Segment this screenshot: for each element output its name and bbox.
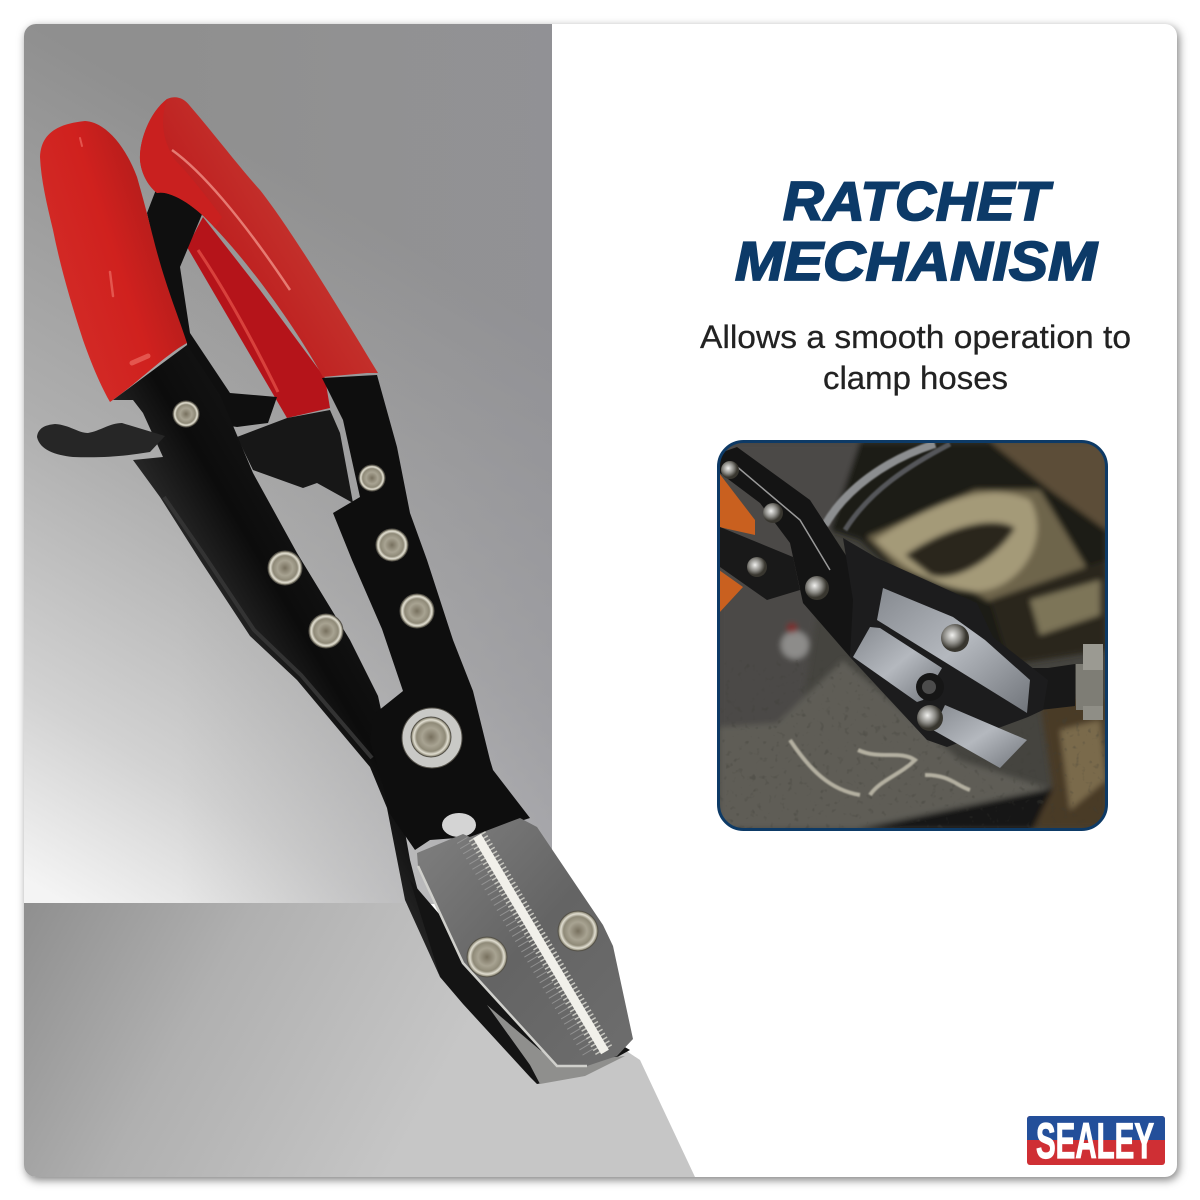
left handle rivets [268, 551, 343, 648]
lower silver plate: rear piece [853, 627, 942, 702]
ratchet plate [237, 410, 353, 503]
right handle black arm [322, 375, 530, 850]
left arm edge strip [164, 497, 372, 758]
grip: right handle inner sleeve [187, 217, 330, 418]
jaw back [843, 538, 1048, 747]
pivot washer [402, 708, 462, 768]
hose end [916, 673, 938, 700]
hose clamp [1076, 644, 1103, 720]
description text: clamp hoses [823, 360, 1008, 396]
heading [735, 170, 1098, 292]
rivets [173, 401, 598, 977]
jaw plate [417, 818, 633, 1066]
description text [700, 319, 1131, 396]
product: hose clamp pliers [37, 97, 633, 1084]
grip highlight [172, 150, 290, 290]
grit texture [719, 660, 1106, 829]
jaw rivets [467, 911, 598, 977]
jaw serrated teeth [462, 836, 605, 1056]
grip: right handle outer sleeve [140, 97, 378, 377]
jaw silver edge [487, 1005, 625, 1084]
ratchet release lever [37, 423, 165, 457]
jaw silver rim [418, 866, 587, 1066]
panel: studio backdrop [24, 24, 695, 1177]
description text: Allows a smooth operation to [700, 319, 1131, 355]
heading: RATCHET [783, 170, 1054, 232]
left grip highlights [80, 138, 148, 363]
lower silver plate: front piece [933, 705, 1027, 768]
photo rivets [721, 461, 969, 731]
heading: MECHANISM [735, 230, 1098, 292]
grip: left handle sleeve [40, 121, 187, 402]
pivot hole [442, 813, 476, 837]
jaw lower body [410, 880, 630, 1084]
inset photo: pliers clamping a hose [718, 442, 1106, 830]
left handle black arm [113, 345, 440, 977]
grip front fold [140, 99, 222, 228]
pliers arms [720, 527, 800, 600]
upper pawl rivet [173, 401, 199, 427]
inner sleeve highlight [198, 250, 278, 392]
floor debris streaks [790, 740, 970, 795]
orange glove [719, 473, 755, 535]
background tube [825, 444, 950, 530]
upper silver plate [877, 588, 1030, 713]
right handle rivets [359, 465, 434, 628]
hose [1032, 664, 1075, 710]
inner black arc and ratchet bar [147, 183, 277, 427]
